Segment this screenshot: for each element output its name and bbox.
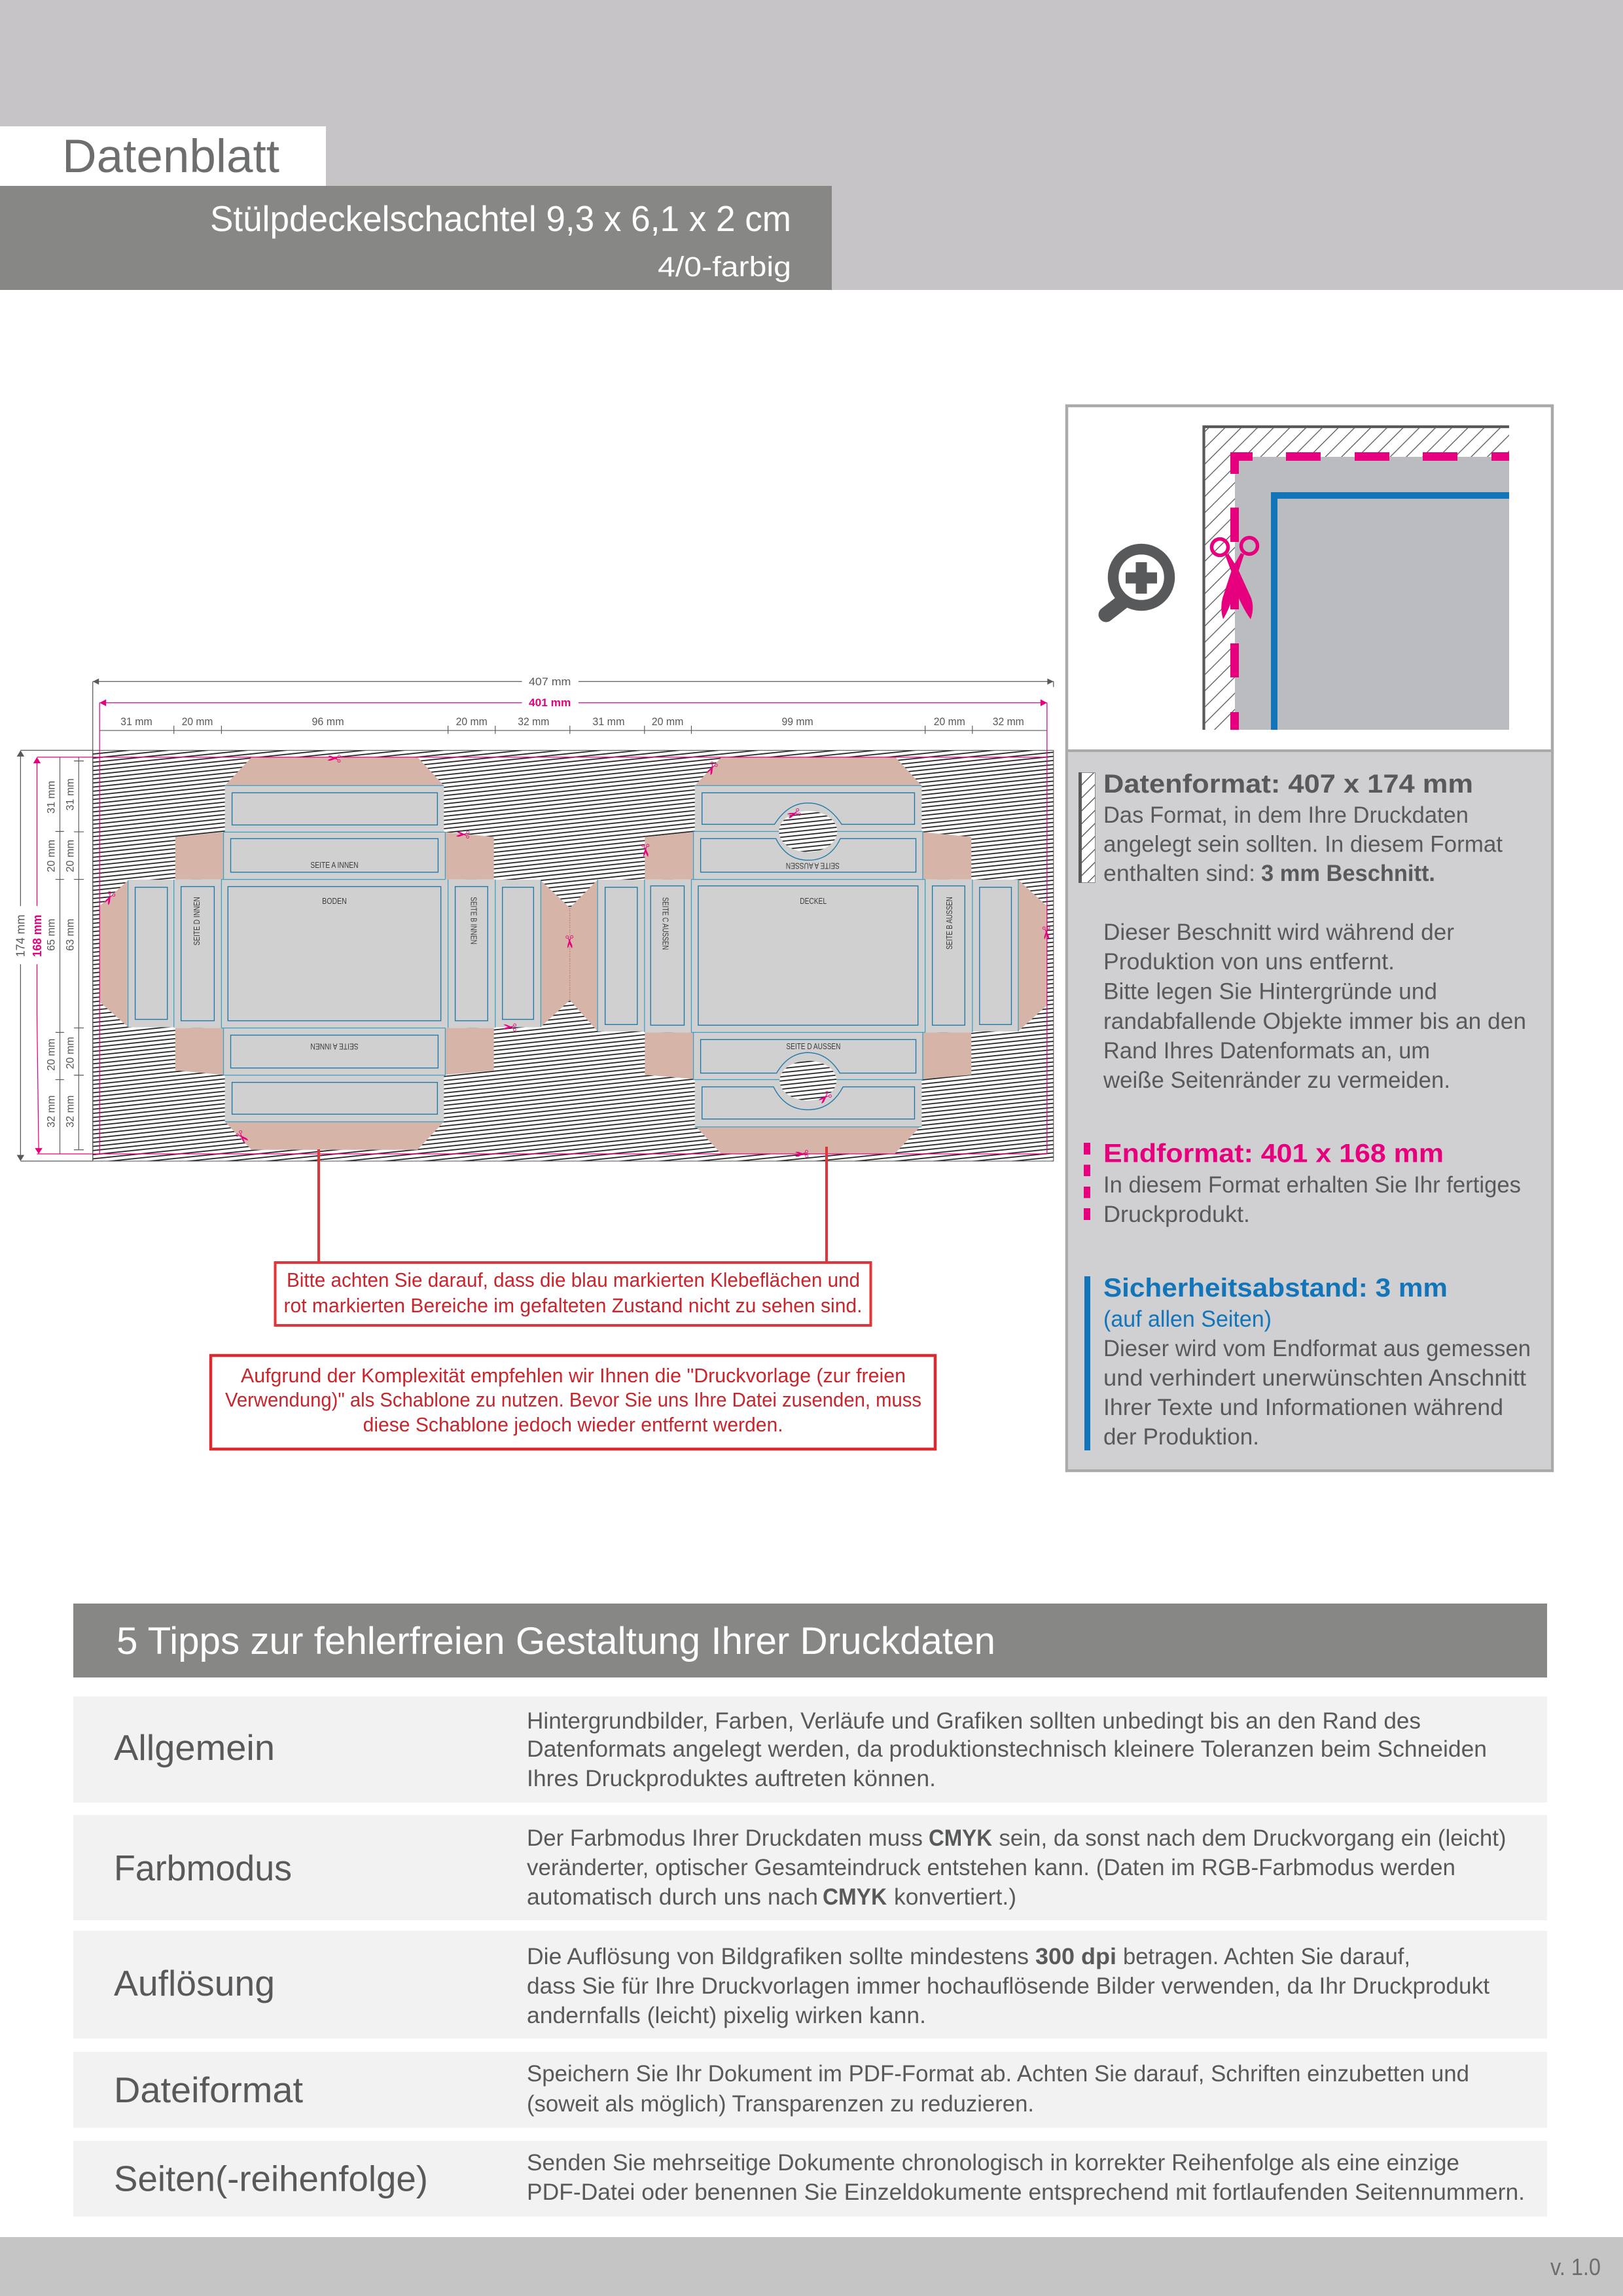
tip row: Seiten(-reihenfolge) <box>73 2141 1547 2216</box>
callout: glue areas: Bitte achten Sie darauf, dass die blau markierten Klebeflächen und <box>287 1268 860 1291</box>
text: Datenformat: Datenformat: 407 x 174 mm <box>1103 770 1473 798</box>
panel height dimensions: 20 mm <box>64 1037 76 1069</box>
text: Datenformat: angelegt sein sollten. In diesem Format <box>1103 831 1503 857</box>
tip row: Farbmodus: veränderter, optischer Gesamteindruck entstehen kann. (Daten im RGB-Farbmodus werden <box>527 1855 1455 1880</box>
callout: glue areas: rot markierten Bereiche im gefalteten Zustand nicht zu sehen sind. <box>284 1294 863 1317</box>
text: Sicherheitsabstand: Sicherheitsabstand: 3 mm <box>1103 1274 1448 1302</box>
product subtitle: 4/0-farbig <box>658 251 791 283</box>
text: bleed explanation <box>1103 920 1526 1093</box>
tip row: Auflösung <box>73 1931 1547 2038</box>
horizontal dimension: 407 mm: 407 mm <box>529 676 571 688</box>
side labels: BODEN <box>322 897 347 906</box>
text: bleed explanation: Produktion von uns entfernt. <box>1103 949 1395 975</box>
tip row: Seiten(-reihenfolge): Seiten(-reihenfolge) <box>114 2159 428 2199</box>
side labels: SEITE B INNEN <box>469 897 478 944</box>
panel height dimensions: 20 mm <box>46 840 58 872</box>
text: bleed explanation: randabfallende Objekte immer bis an den <box>1103 1009 1526 1034</box>
panel height dimensions: 20 mm <box>64 840 76 872</box>
horizontal dimension: 401 mm <box>99 697 1047 709</box>
tip row: Farbmodus: sein, da sonst nach dem Druckvorgang ein (leicht) <box>999 1825 1507 1851</box>
box template: bottom part (Boden) <box>99 757 570 1150</box>
panel height dimensions: 65 mm <box>46 919 58 951</box>
text: Datenformat: Das Format, in dem Ihre Druckdaten <box>1103 802 1469 828</box>
side labels: SEITE C AUSSEN <box>661 897 670 950</box>
panel width dimensions <box>99 716 1047 734</box>
text: Datenformat: enthalten sind: <box>1103 861 1255 886</box>
vertical dimension: 174 mm: 174 mm <box>14 914 27 957</box>
tip row: Allgemein: Allgemein <box>114 1727 275 1768</box>
tip row: Auflösung: Die Auflösung von Bildgrafiken sollte mindestens <box>527 1944 1029 1969</box>
vertical dimension: 174 mm <box>14 750 93 1161</box>
product subtitle: Stülpdeckelschachtel 9,3 x 6,1 x 2 cm <box>210 198 791 239</box>
footer with version <box>0 2237 1623 2296</box>
panel height dimensions: 63 mm <box>64 919 76 951</box>
tip row: Allgemein <box>73 1696 1547 1803</box>
product subtitle <box>0 186 832 290</box>
panel width dimensions: 20 mm <box>934 716 965 728</box>
text: Sicherheitsabstand <box>1084 1274 1531 1450</box>
tip row: Farbmodus: CMYK <box>823 1884 887 1910</box>
panel width dimensions: 20 mm <box>652 716 683 728</box>
heading: 5 Tipps: 5 Tipps zur fehlerfreien Gestaltung Ihrer Druckdaten <box>116 1620 995 1662</box>
panel width dimensions: 99 mm <box>782 716 813 728</box>
panel width dimensions: 31 mm <box>592 716 624 728</box>
tip row: Dateiformat: Dateiformat <box>114 2070 303 2110</box>
tip row: Allgemein: Hintergrundbilder, Farben, Verläufe und Grafiken sollten unbedingt bis an den Rand des <box>527 1708 1421 1734</box>
thumb holes <box>779 811 837 852</box>
side labels: SEITE D INNEN <box>192 897 202 946</box>
icon: magnifier <box>1106 549 1169 615</box>
tip row: Farbmodus: konvertiert.) <box>894 1884 1016 1910</box>
text: Sicherheitsabstand: der Produktion. <box>1103 1424 1259 1450</box>
side labels: SEITE A AUSSEN <box>786 861 840 870</box>
text: Endformat: Druckprodukt. <box>1103 1202 1250 1227</box>
icon: hatched bleed strip <box>1079 772 1096 883</box>
text: Datenformat <box>1079 770 1503 886</box>
tip row: Auflösung: Auflösung <box>114 1963 275 2003</box>
dieline diagram <box>14 676 1054 1161</box>
horizontal dimension: 401 mm: 401 mm <box>529 697 571 709</box>
text: Sicherheitsabstand: und verhindert unerwünschten Anschnitt <box>1103 1365 1526 1391</box>
side labels: DECKEL <box>800 897 827 906</box>
tip row: Allgemein: Datenformats angelegt werden, da produktionstechnisch kleinere Toleranzen beim Schneiden <box>527 1736 1487 1762</box>
panel width dimensions: 32 mm <box>518 716 549 728</box>
icon: safety margin bar <box>1084 1276 1090 1450</box>
side labels: SEITE B AUSSEN <box>945 897 954 950</box>
panel height dimensions: 20 mm <box>46 1039 58 1071</box>
side labels: SEITE D AUSSEN <box>786 1042 840 1051</box>
panel width dimensions: 20 mm <box>182 716 213 728</box>
footer with version: v. 1.0 <box>1550 2253 1601 2280</box>
callout: template note: diese Schablone jedoch wieder entfernt werden. <box>363 1413 783 1436</box>
callout: template note <box>211 1355 935 1449</box>
panel width dimensions: 32 mm <box>993 716 1024 728</box>
tip row: Dateiformat: Speichern Sie Ihr Dokument im PDF-Format ab. Achten Sie darauf, Schriften einzubetten und <box>527 2061 1469 2087</box>
tip row: Dateiformat: (soweit als möglich) Transparenzen zu reduzieren. <box>527 2091 1034 2117</box>
callout: template note: Aufgrund der Komplexität empfehlen wir Ihnen die "Druckvorlage (zur freien <box>241 1364 906 1387</box>
title: Datenblatt: Datenblatt <box>62 131 279 183</box>
text: bleed explanation: Dieser Beschnitt wird während der <box>1103 920 1454 945</box>
print data background pattern <box>93 750 1054 1161</box>
tip row: Dateiformat <box>73 2052 1547 2128</box>
panel height dimensions: 32 mm <box>46 1096 58 1128</box>
tip row: Auflösung: betragen. Achten Sie darauf, <box>1123 1944 1410 1969</box>
text: Endformat <box>1084 1139 1521 1227</box>
tip row: Auflösung: dass Sie für Ihre Druckvorlagen immer hochauflösende Bilder verwenden, da Ihr Druckprodukt <box>527 1973 1489 1999</box>
panel: format legend <box>1065 406 1554 1471</box>
tip row: Seiten(-reihenfolge): Senden Sie mehrseitige Dokumente chronologisch in korrekter Reihenfolge als eine einzige <box>527 2150 1459 2176</box>
text: Endformat: In diesem Format erhalten Sie Ihr fertiges <box>1103 1172 1521 1198</box>
text: Endformat: Endformat: 401 x 168 mm <box>1103 1139 1444 1168</box>
trim line (Endformat) <box>37 703 1047 1154</box>
panel height dimensions <box>46 757 84 1154</box>
icon: small scissors on the cut line <box>103 754 1050 1157</box>
box template: lid part (Deckel) <box>570 757 1047 1155</box>
panel height dimensions: 31 mm <box>64 778 76 810</box>
side labels: SEITE A INNEN <box>310 861 359 870</box>
heading: 5 Tipps <box>73 1604 1547 1677</box>
side labels <box>661 861 954 1051</box>
tip row: Auflösung: andernfalls (leicht) pixelig wirken kann. <box>527 2003 926 2028</box>
panel width dimensions: 20 mm <box>456 716 488 728</box>
text: Sicherheitsabstand: (auf allen Seiten) <box>1103 1306 1272 1332</box>
format corner illustration <box>1204 427 1509 730</box>
side labels <box>192 861 478 1051</box>
panel height dimensions: 31 mm <box>46 781 58 814</box>
panel width dimensions: 31 mm <box>120 716 152 728</box>
tip row: Farbmodus <box>73 1815 1547 1920</box>
text: Sicherheitsabstand: Ihrer Texte und Informationen während <box>1103 1395 1503 1420</box>
panel height dimensions: 32 mm <box>64 1096 76 1128</box>
panel width dimensions: 96 mm <box>312 716 344 728</box>
text: bleed explanation: Bitte legen Sie Hintergründe und <box>1103 979 1437 1004</box>
title: Datenblatt <box>0 126 326 187</box>
header band <box>0 0 1623 290</box>
text: bleed explanation: weiße Seitenränder zu vermeiden. <box>1103 1067 1450 1093</box>
tip row: Auflösung: 300 dpi <box>1035 1944 1116 1969</box>
tip row: Farbmodus: CMYK <box>929 1825 992 1851</box>
callout: glue areas <box>275 1263 870 1325</box>
horizontal dimension: 407 mm <box>93 676 1054 1161</box>
icon: dashed trim marker <box>1084 1143 1090 1220</box>
text: Datenformat: 3 mm Beschnitt. <box>1261 861 1435 886</box>
vertical dimension: 168 mm <box>30 757 44 1154</box>
vertical dimension: 168 mm: 168 mm <box>30 914 44 957</box>
tip row: Farbmodus: automatisch durch uns nach <box>527 1884 818 1910</box>
callout: template note: Verwendung)" als Schablone zu nutzen. Bevor Sie uns Ihre Datei zusenden, muss <box>225 1388 921 1411</box>
tip row: Farbmodus: Farbmodus <box>114 1848 292 1888</box>
text: bleed explanation: Rand Ihres Datenformats an, um <box>1103 1038 1430 1064</box>
side labels: SEITE A INNEN <box>310 1042 359 1051</box>
callout connector lines <box>317 1147 828 1262</box>
tip row: Seiten(-reihenfolge): PDF-Datei oder benennen Sie Einzeldokumente entsprechend mit fortlaufenden Seitennummern. <box>527 2179 1525 2205</box>
tip row: Farbmodus: Der Farbmodus Ihrer Druckdaten muss <box>527 1825 923 1851</box>
tip row: Allgemein: Ihres Druckproduktes auftreten können. <box>527 1766 936 1791</box>
text: Sicherheitsabstand: Dieser wird vom Endformat aus gemessen <box>1103 1336 1531 1361</box>
